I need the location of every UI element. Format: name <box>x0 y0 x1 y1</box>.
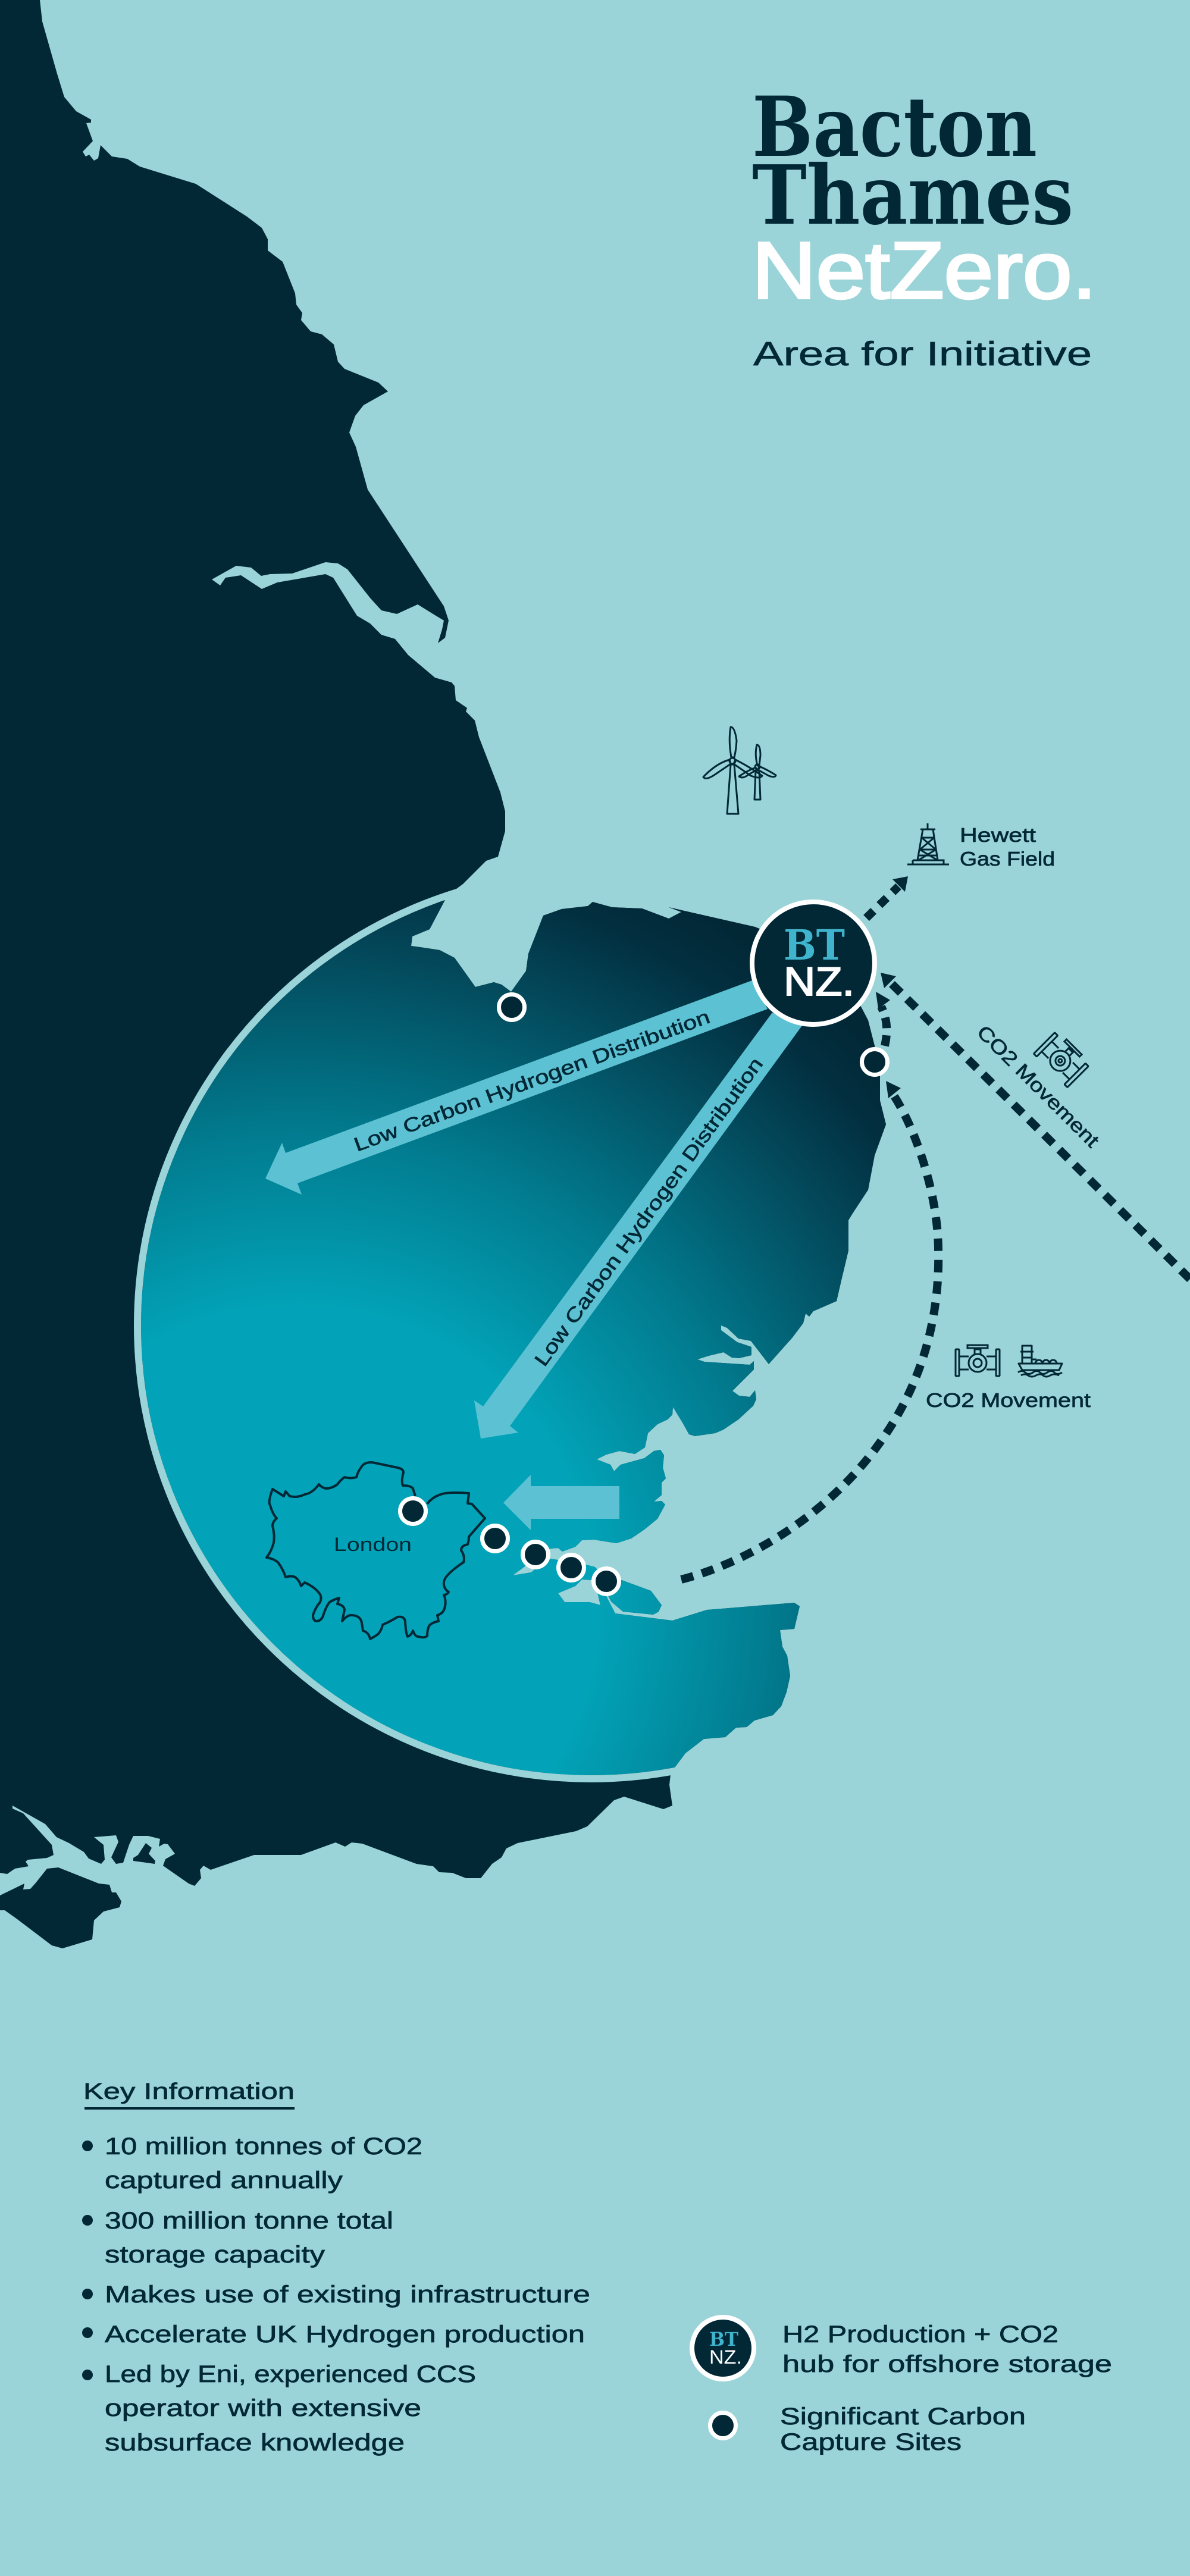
panel: key information: subsurface knowledge <box>105 2430 405 2456</box>
legend: capture sites: Capture Sites <box>780 2429 962 2455</box>
legend: hub <box>692 2317 1112 2379</box>
legend: capture sites: Significant Carbon <box>780 2403 1026 2430</box>
subtitle: Area for Initiative: Area for Initiative <box>753 335 1092 373</box>
legend: hub: hub for offshore storage <box>782 2351 1112 2377</box>
hub badge: BT NZ. <box>752 902 875 1024</box>
capture site: Wash <box>499 995 525 1020</box>
legend: hub: NZ. <box>709 2346 742 2368</box>
icon: wind turbines <box>703 727 776 814</box>
icon: pipeline valve, diagonal <box>1034 1030 1091 1088</box>
legend: capture sites <box>710 2403 1026 2455</box>
title: Bacton Thames Net Zero: Bacton <box>752 78 1037 176</box>
heading: Key Information: Key Information <box>83 2079 295 2104</box>
panel: key information: storage capacity <box>105 2242 325 2268</box>
arrow: hydrogen distribution west <box>265 980 768 1195</box>
capture site: Thames 4 <box>594 1568 619 1594</box>
panel: key information: operator with extensive <box>105 2395 421 2421</box>
panel: key information: captured annually <box>105 2167 343 2193</box>
hub badge: BT NZ.: NZ. <box>784 959 854 1004</box>
title: Bacton Thames Net Zero <box>752 78 1097 315</box>
arrow: dashed straight CO2 movement <box>881 973 1190 1279</box>
legend: hub: H2 Production + CO2 <box>782 2321 1059 2348</box>
label: Hewett Gas Field <box>960 824 1055 870</box>
label: Low Carbon Hydrogen Distribution (south-west arrow): Low Carbon Hydrogen Distribution <box>530 1053 767 1370</box>
map: land mass of eastern England <box>0 0 886 1948</box>
icon: gas rig <box>907 823 949 864</box>
label: London: London <box>334 1534 412 1555</box>
capture site: Thames 1 <box>482 1525 508 1552</box>
label: Hewett Gas Field: Hewett <box>960 824 1036 846</box>
label: Low Carbon Hydrogen Distribution (west arrow): Low Carbon Hydrogen Distribution <box>351 1005 713 1156</box>
arrow: dashed to Hewett Gas Field <box>866 876 908 918</box>
capture site: Thames 3 <box>558 1555 584 1580</box>
title: Bacton Thames Net Zero: NetZero. <box>752 225 1097 315</box>
hub badge: BT NZ.: BT <box>784 920 845 970</box>
London boundary <box>267 1462 485 1639</box>
panel: key information: Accelerate UK Hydrogen production <box>105 2321 585 2348</box>
panel: key information: 10 million tonnes of CO2 <box>105 2133 422 2160</box>
arrow: dashed curved CO2 movement <box>681 1081 938 1580</box>
panel: key information: Makes use of existing infrastructure <box>105 2282 590 2308</box>
area ring <box>137 872 1044 1779</box>
capture site: Thames 2 <box>522 1542 549 1567</box>
capture site: coast <box>862 1049 888 1074</box>
title: Bacton Thames Net Zero: Thames <box>752 148 1073 243</box>
label: Hewett Gas Field: Gas Field <box>960 848 1055 870</box>
panel: key information: 300 million tonne total <box>105 2208 393 2234</box>
capture site: London <box>400 1498 426 1524</box>
panel: key information <box>82 2079 590 2456</box>
label: CO2 Movement, diagonal: CO2 Movement <box>973 1021 1104 1152</box>
label: CO2 Movement: CO2 Movement <box>926 1389 1091 1411</box>
arrow: distribution into London <box>503 1475 619 1530</box>
panel: key information: Led by Eni, experienced CCS <box>105 2361 476 2387</box>
arrow: short dashed from capture site to hub <box>876 992 890 1046</box>
area of initiative: gradient circle over land <box>141 900 886 1775</box>
icon: ship <box>1018 1346 1062 1377</box>
arrow: hydrogen distribution south-west <box>474 1013 802 1439</box>
legend: hub: BT <box>709 2328 738 2351</box>
icon: pipeline valve <box>956 1345 1000 1376</box>
